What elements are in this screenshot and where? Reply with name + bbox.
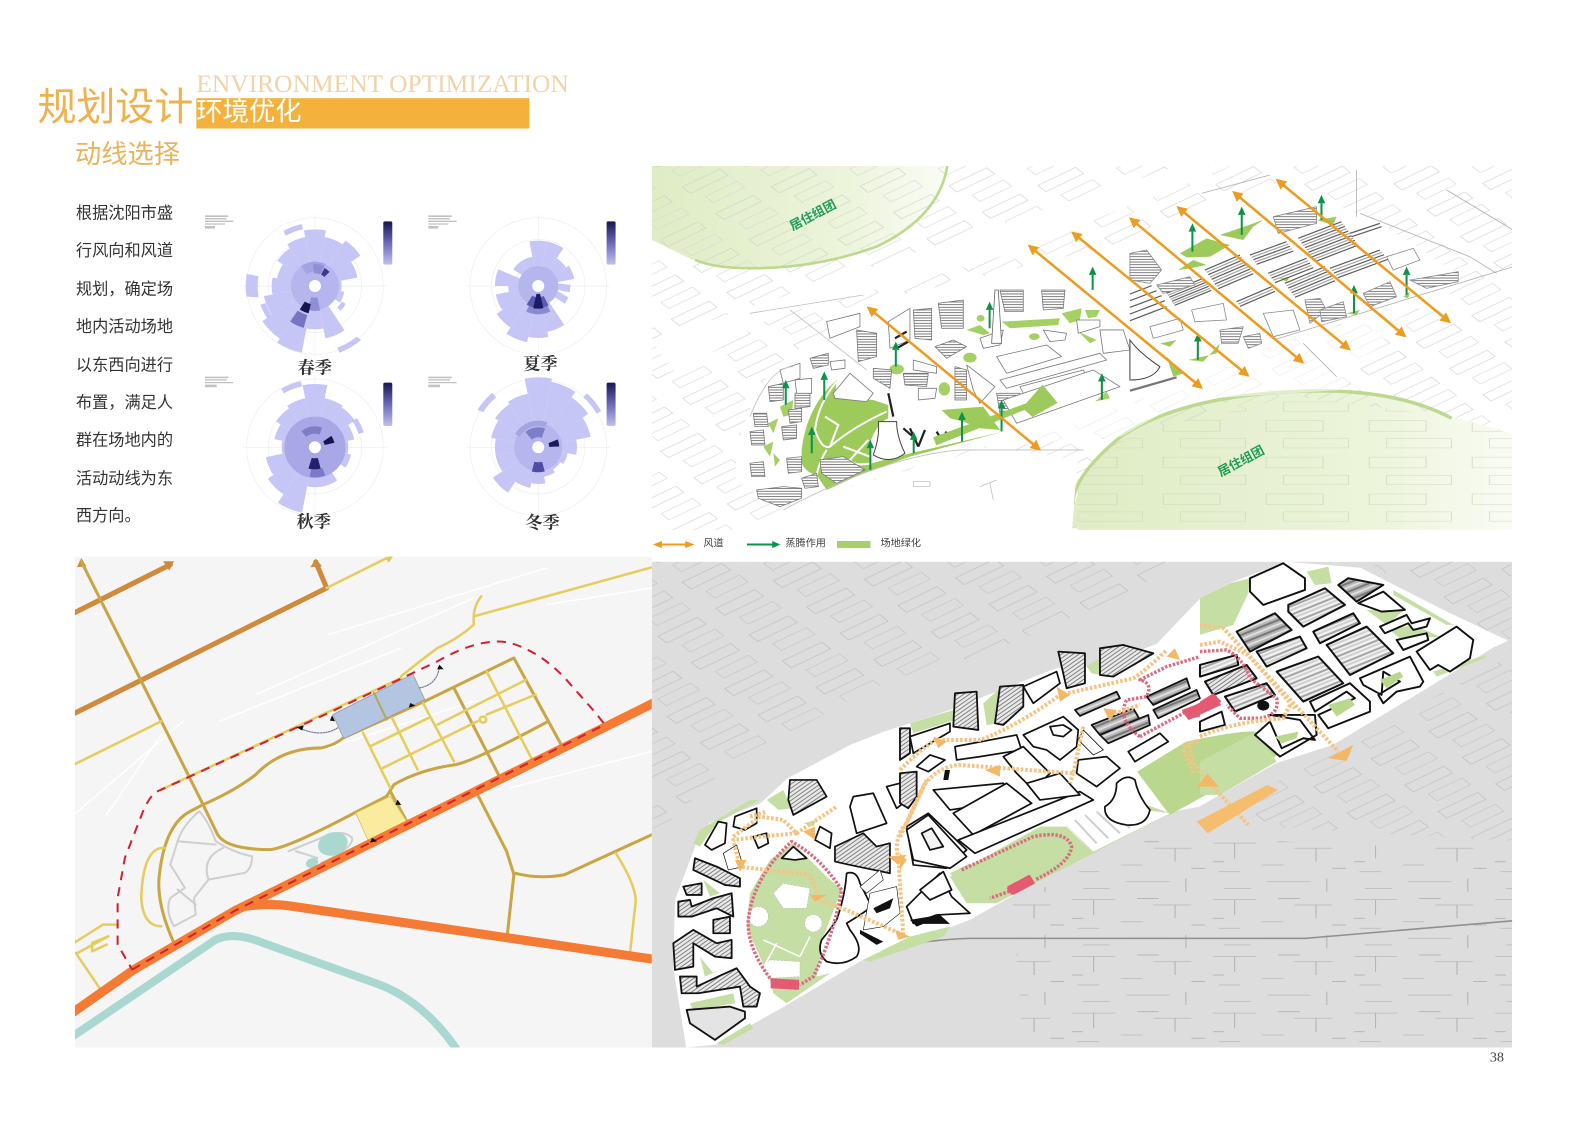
wind rose: summer xyxy=(467,214,610,358)
heading: English subtitle: ENVIRONMENT OPTIMIZATION xyxy=(196,70,569,98)
dotted access arcs xyxy=(299,666,439,733)
rail line xyxy=(833,920,1522,968)
residential zone edges xyxy=(695,166,1452,505)
heading: section bar: 环境优化 xyxy=(196,96,302,127)
color scales xyxy=(383,221,616,426)
pink node xyxy=(771,978,799,990)
black arrowheads xyxy=(296,665,444,843)
season label: summer: 夏季 xyxy=(523,349,558,374)
east portion: sheds, towers and patches xyxy=(1130,170,1513,391)
towers xyxy=(900,645,1153,808)
park detail xyxy=(748,883,822,978)
buildings xyxy=(750,290,1130,507)
pond xyxy=(304,828,352,870)
rail track xyxy=(1130,377,1177,391)
pink oval route xyxy=(748,842,842,985)
text block: description: 群在场地内的 xyxy=(76,433,173,450)
green: west park and edges xyxy=(690,790,970,1045)
season label: spring: 春季 xyxy=(298,353,332,378)
text block: description xyxy=(76,204,173,526)
green: lawn xyxy=(1137,731,1278,815)
season label: autumn: 秋季 xyxy=(297,507,331,532)
buildings xyxy=(1130,207,1458,348)
wind rose: winter xyxy=(439,348,637,546)
cooling tower xyxy=(873,422,905,460)
season label: winter: 冬季 xyxy=(525,508,560,533)
text block: description: 行风向和风道 xyxy=(76,243,173,261)
evaporation arrows xyxy=(782,195,1410,470)
black hatching xyxy=(860,898,950,945)
text block: description: 布置，满足人 xyxy=(76,395,173,412)
text block: description: 以东西向进行 xyxy=(76,357,173,374)
white open space along roads and river xyxy=(652,167,1403,530)
legend label: evaporation: 蒸腾作用 xyxy=(785,538,826,550)
black block xyxy=(943,770,950,780)
wind rose: autumn xyxy=(226,359,404,536)
text block: description: 根据沈阳市盛 xyxy=(76,205,173,223)
road lines xyxy=(750,295,1083,510)
blue plaza xyxy=(333,674,425,739)
sheds xyxy=(1075,678,1200,743)
heading: main title: 规划设计 xyxy=(37,86,193,130)
legend xyxy=(653,538,921,550)
green patches xyxy=(1160,217,1410,377)
wind rose: spring xyxy=(219,190,411,382)
lawn entrance route xyxy=(1190,742,1248,825)
orange routes xyxy=(900,650,1200,837)
west portion xyxy=(673,780,970,1045)
pink node central xyxy=(1182,694,1221,720)
white buildings xyxy=(705,780,970,963)
orange arrowheads xyxy=(735,827,910,940)
green: east lawn xyxy=(942,407,1000,430)
site base xyxy=(673,562,1508,1048)
panel: wind corridor axonometric map xyxy=(652,166,1512,530)
label: southeast residential: 居住组团 xyxy=(1215,442,1267,479)
label: northwest residential: 居住组团 xyxy=(787,196,839,233)
pink node xyxy=(1200,693,1222,713)
orange entrance plaza xyxy=(1197,785,1278,833)
red dashed route xyxy=(118,642,605,970)
heading: sub-section title: 动线选择 xyxy=(75,139,180,169)
text block: description: 规划，确定场 xyxy=(76,281,173,298)
site base xyxy=(736,183,1457,507)
page number: 38 xyxy=(1490,1051,1504,1066)
legend icons xyxy=(653,541,870,548)
city blocks: northwest xyxy=(652,560,1186,838)
legend label: greenery: 场地绿化 xyxy=(881,538,921,550)
hatched apron xyxy=(1063,805,1170,852)
road arrowheads xyxy=(77,555,394,571)
black blob xyxy=(1257,701,1269,711)
orange routes xyxy=(733,780,927,935)
track pink node xyxy=(1007,875,1035,895)
green patches xyxy=(1200,567,1487,795)
striped sheds xyxy=(1200,578,1393,712)
city blocks: line background xyxy=(644,160,1522,530)
river xyxy=(70,936,456,1048)
faint white streaks xyxy=(74,568,652,815)
lawn arrowhead xyxy=(1197,773,1218,787)
fine road lines xyxy=(1202,170,1513,377)
connector bands xyxy=(907,672,1168,900)
park paths xyxy=(763,937,810,965)
pink route xyxy=(1200,650,1277,718)
text block: description: 西方向。 xyxy=(76,508,141,526)
east portion xyxy=(1200,563,1487,795)
wind corridor arrows xyxy=(868,180,1449,449)
residential zone: northwest xyxy=(652,166,947,268)
green strips and field xyxy=(910,658,1170,903)
west portion: park, towers and houses xyxy=(750,290,1130,510)
courtyard greens xyxy=(1275,672,1403,743)
text block: description: 活动动线为东 xyxy=(76,470,173,488)
legend label: wind: 风道 xyxy=(703,538,724,550)
route shadow xyxy=(1233,625,1300,702)
central lower strip green xyxy=(933,385,1058,445)
chimney xyxy=(992,290,1002,343)
city blocks: south xyxy=(1012,835,1522,1052)
yellow plaza xyxy=(356,796,407,841)
panel: circulation axonometric map xyxy=(652,562,1512,1048)
orange arrowheads xyxy=(900,648,1180,870)
dark shed rows xyxy=(1130,222,1388,321)
city blocks: southeast xyxy=(1240,648,1522,842)
central portion xyxy=(900,645,1200,903)
white buildings xyxy=(1200,563,1473,757)
tiny legends xyxy=(205,215,457,387)
residential buildings xyxy=(673,858,760,1040)
pink track xyxy=(962,657,1200,898)
text block: description: 地内活动场地 xyxy=(76,319,173,336)
park paths xyxy=(815,382,887,475)
black structures xyxy=(888,332,947,447)
yellow minor roads xyxy=(74,556,656,988)
residential zone: southeast xyxy=(1072,391,1522,528)
panel: road network map xyxy=(74,556,652,1048)
chart: four seasonal wind roses xyxy=(205,214,616,533)
green: river park xyxy=(802,380,1003,490)
gold secondary roads xyxy=(81,561,656,941)
heading: section bar xyxy=(196,98,529,129)
exit arrowhead xyxy=(1328,745,1353,761)
green: small patches xyxy=(763,308,1110,467)
brown arterial roads xyxy=(74,562,327,714)
cooling tower xyxy=(1130,340,1160,380)
main orange roads xyxy=(72,702,656,1013)
city blocks: far northeast xyxy=(1365,560,1511,655)
pale grey park paths xyxy=(168,811,352,926)
orange routes xyxy=(1200,625,1338,752)
pink nodes xyxy=(1007,703,1200,895)
